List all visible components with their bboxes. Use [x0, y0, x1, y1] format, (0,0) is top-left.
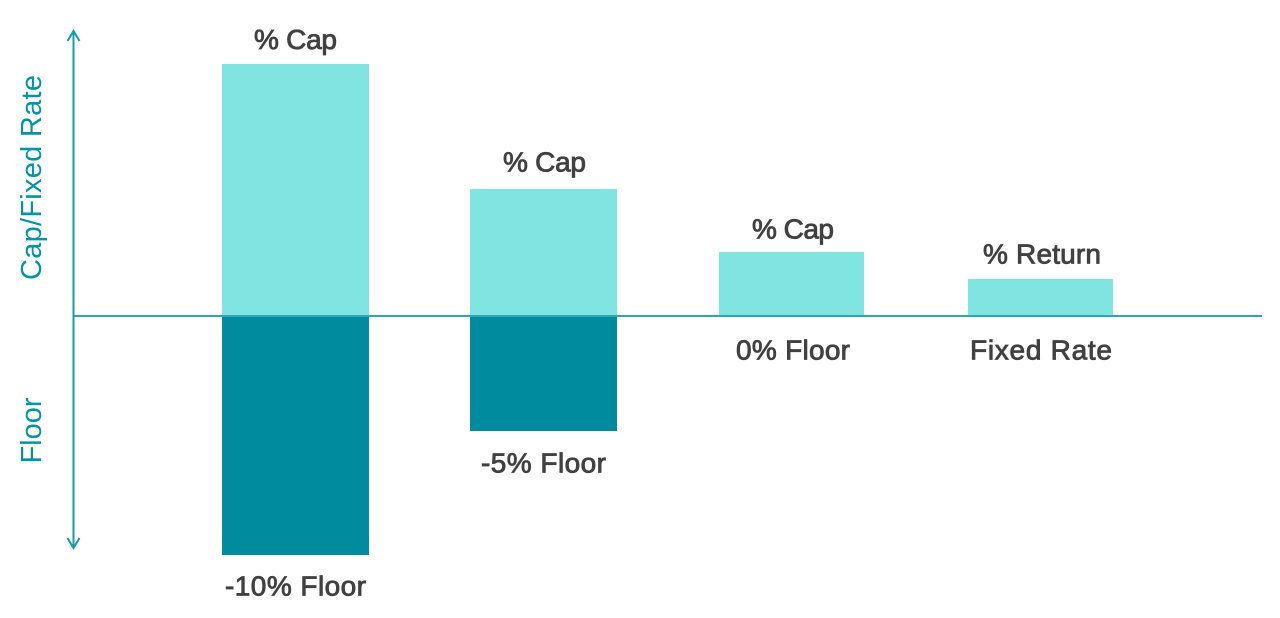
label: -5% floor: -5% Floor [481, 448, 606, 478]
bar: -5% floor [470, 316, 617, 431]
label: return: % Return [983, 238, 1101, 270]
vertical double arrow [68, 31, 80, 548]
bar: fixed return [968, 279, 1113, 316]
label: fixed rate: Fixed Rate [970, 334, 1112, 366]
label: 0% floor: 0% Floor [736, 334, 850, 366]
axis label: cap/fixed rate: Cap/Fixed Rate [16, 75, 48, 280]
axis label: floor: Floor [16, 397, 48, 464]
bar: second cap [470, 189, 617, 316]
horizontal axis [73, 315, 1262, 317]
label: third cap: % Cap [752, 214, 834, 244]
bar: third cap [719, 252, 864, 316]
label: -10% floor: -10% Floor [225, 570, 366, 602]
label: second cap: % Cap [503, 146, 586, 178]
label: first cap: % Cap [254, 24, 337, 55]
bar: first cap [222, 64, 369, 316]
bar: -10% floor [222, 316, 369, 555]
